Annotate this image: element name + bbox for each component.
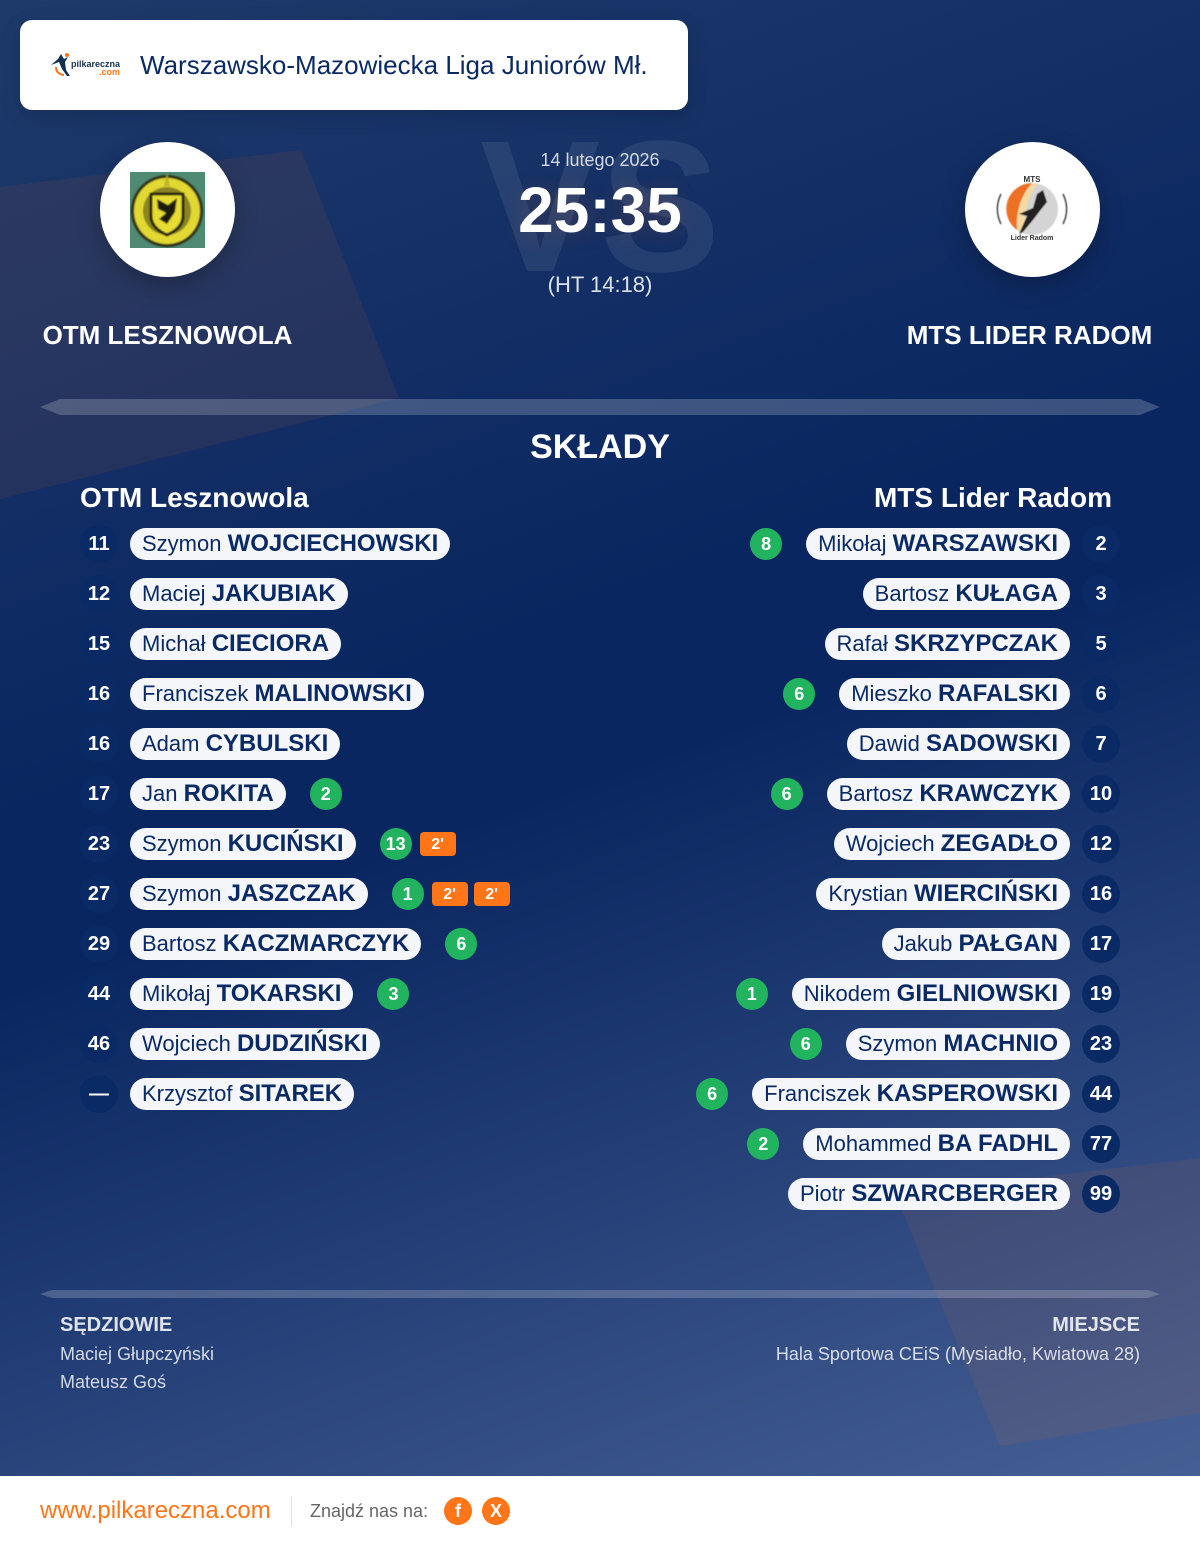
player row — [747, 1125, 1120, 1163]
player row: 16 — [1090, 882, 1112, 904]
player row — [825, 628, 1107, 660]
venue: Hala Sportowa CEiS (Mysiadło, Kwiatowa 28) — [776, 1344, 1140, 1364]
player row — [88, 878, 510, 910]
player row — [88, 628, 341, 660]
icon: MTS crest: Lider Radom — [1011, 235, 1053, 242]
player row: 44 — [88, 982, 110, 1004]
website: www.pilkareczna.com — [40, 1497, 271, 1524]
player row: 12 — [88, 582, 110, 604]
home team name: OTM LESZNOWOLA — [43, 320, 292, 350]
player row: Szymon KUCIŃSKI — [142, 830, 344, 857]
player row: Franciszek MALINOWSKI — [142, 680, 412, 707]
player row: 1 — [403, 884, 413, 904]
icon: OTM crest — [130, 172, 205, 248]
player row: Maciej JAKUBIAK — [142, 580, 336, 607]
halftime score: (HT 14:18) — [548, 272, 652, 297]
player row: 11 — [88, 532, 110, 554]
player row: 5 — [1095, 632, 1107, 654]
player row: 17 — [1090, 932, 1112, 954]
player row: 2' — [443, 886, 456, 903]
player row — [736, 975, 1120, 1013]
player row: — — [89, 1082, 109, 1104]
player row: 15 — [88, 632, 110, 654]
icon: MTS crest: MTS — [1024, 175, 1041, 184]
icon: pilkareczna logo — [51, 53, 121, 77]
player row: 6 — [801, 1034, 811, 1054]
player row: 16 — [88, 682, 110, 704]
player row: 2' — [431, 836, 444, 853]
player row: Szymon WOJCIECHOWSKI — [142, 530, 438, 557]
score: 25:35 — [518, 174, 682, 246]
player row: 6 — [707, 1084, 717, 1104]
player row — [88, 978, 409, 1010]
player row — [816, 875, 1120, 913]
player row: 99 — [1090, 1182, 1112, 1204]
player row: Wojciech ZEGADŁO — [846, 830, 1058, 857]
player row: 12 — [1090, 832, 1112, 854]
player row: Krzysztof SITAREK — [142, 1080, 342, 1107]
player row: 8 — [761, 534, 771, 554]
social label: Znajdź nas na: — [310, 1501, 428, 1521]
player row — [88, 728, 340, 760]
player row: Dawid SADOWSKI — [859, 730, 1058, 757]
player row: 2 — [758, 1134, 768, 1154]
divider — [40, 399, 1160, 415]
icon: facebook: f — [455, 1501, 461, 1521]
player row: Krystian WIERCIŃSKI — [828, 880, 1058, 907]
player row: Mieszko RAFALSKI — [851, 680, 1058, 707]
icon: X: X — [490, 1501, 502, 1521]
player row — [88, 528, 450, 560]
home lineup — [80, 528, 510, 1113]
player row: 29 — [88, 932, 110, 954]
player row: 44 — [1090, 1082, 1112, 1104]
player row: Mikołaj WARSZAWSKI — [818, 530, 1058, 557]
footer — [0, 1476, 1200, 1546]
player row — [788, 1175, 1120, 1213]
player row — [88, 828, 456, 860]
venue — [776, 1314, 1140, 1364]
player row: Jan ROKITA — [142, 780, 274, 807]
player row: Jakub PAŁGAN — [894, 930, 1058, 957]
player row: Bartosz KUŁAGA — [875, 580, 1058, 607]
referees: SĘDZIOWIE — [60, 1314, 172, 1336]
player row: Rafał SKRZYPCZAK — [836, 630, 1058, 657]
icon: pilkareczna logo: .com — [99, 67, 120, 77]
player row: 6 — [782, 784, 792, 804]
player row — [88, 578, 348, 610]
player row — [783, 678, 1112, 712]
player row: Szymon JASZCZAK — [142, 880, 356, 907]
player row — [88, 928, 477, 960]
player row: 2' — [485, 886, 498, 903]
player row: Adam CYBULSKI — [142, 730, 328, 757]
player row: 6 — [1095, 682, 1107, 704]
player row: Nikodem GIELNIOWSKI — [804, 980, 1058, 1007]
icon: facebook — [444, 1497, 472, 1525]
player row: Bartosz KRAWCZYK — [839, 780, 1058, 807]
away lineup — [696, 528, 1120, 1213]
player row: 6 — [456, 934, 466, 954]
player row: 17 — [88, 782, 110, 804]
player row: 1 — [747, 984, 757, 1004]
away crest — [965, 142, 1100, 277]
player row: 2 — [1095, 532, 1107, 554]
player row: 13 — [386, 834, 406, 854]
player row: Mohammed BA FADHL — [815, 1130, 1058, 1157]
divider — [40, 1290, 1160, 1298]
player row — [80, 1075, 354, 1113]
home lineup heading: OTM Lesznowola — [80, 482, 309, 513]
player row — [771, 775, 1120, 813]
player row — [88, 1028, 380, 1060]
player row — [696, 1075, 1120, 1113]
player row: 46 — [88, 1032, 110, 1054]
player row — [882, 925, 1120, 963]
player row: Bartosz KACZMARCZYK — [142, 930, 409, 957]
player row: 23 — [88, 832, 110, 854]
referees — [60, 1314, 214, 1392]
player row: Szymon MACHNIO — [858, 1030, 1058, 1057]
player row: 16 — [88, 732, 110, 754]
player row: 27 — [88, 882, 110, 904]
player row: 3 — [388, 984, 398, 1004]
player row: Michał CIECIORA — [142, 630, 329, 657]
icon: pilkareczna logo: pilkareczna — [71, 59, 121, 70]
VS watermark: VS — [480, 102, 720, 312]
away team name: MTS LIDER RADOM — [907, 320, 1152, 350]
icon: MTS crest — [996, 175, 1068, 242]
away lineup heading: MTS Lider Radom — [874, 482, 1112, 513]
player row — [750, 528, 1107, 560]
player row: 19 — [1090, 982, 1112, 1004]
player row — [863, 578, 1107, 610]
league title: Warszawsko-Mazowiecka Liga Juniorów Mł. — [140, 50, 648, 80]
player row: 10 — [1090, 782, 1112, 804]
home crest — [100, 142, 235, 277]
player row: Mikołaj TOKARSKI — [142, 980, 341, 1007]
player row: 3 — [1095, 582, 1107, 604]
match date: 14 lutego 2026 — [540, 150, 660, 170]
player row — [88, 778, 342, 810]
player row: 23 — [1090, 1032, 1112, 1054]
player row — [88, 678, 424, 710]
lineups heading: SKŁADY — [530, 428, 670, 466]
referees: Mateusz Goś — [60, 1372, 166, 1392]
referees: Maciej Głupczyński — [60, 1344, 214, 1364]
player row: 6 — [794, 684, 804, 704]
player row: Franciszek KASPEROWSKI — [764, 1080, 1058, 1107]
venue: MIEJSCE — [1052, 1314, 1140, 1336]
player row — [834, 825, 1120, 863]
player row: 77 — [1090, 1132, 1112, 1154]
player row: 2 — [321, 784, 331, 804]
icon: X — [482, 1497, 510, 1525]
player row: 7 — [1095, 732, 1107, 754]
player row: Wojciech DUDZIŃSKI — [142, 1030, 368, 1057]
player row — [790, 1025, 1120, 1063]
player row: Piotr SZWARCBERGER — [800, 1180, 1058, 1207]
player row — [847, 725, 1120, 763]
league header card — [20, 20, 688, 110]
